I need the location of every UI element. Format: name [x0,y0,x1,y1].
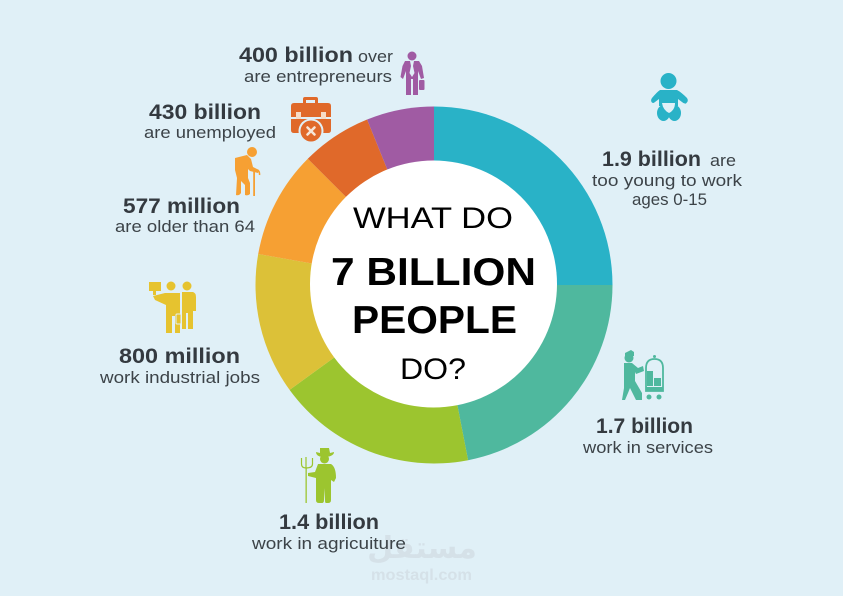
central title [331,202,536,386]
segment: older than 64 [258,159,434,285]
label: entrepreneurs: over [358,47,393,66]
label: agriculture: work in agricuiture [251,534,406,553]
donut hole [310,160,557,408]
segment: entrepreneurs [367,106,434,285]
watermark: mostaql.com [371,567,472,584]
label: unemployed [144,100,276,142]
label: unemployed: are unemployed [144,123,276,142]
label: too young to work [592,147,743,209]
segment: services [434,285,612,460]
label: older than 64: 577 million [123,194,240,218]
label: agriculture [251,510,406,553]
central title: WHAT DO [353,202,513,235]
icon: briefcase [291,97,331,144]
label: too young to work: too young to work [592,171,743,190]
watermark [367,531,477,584]
label: services [582,414,713,457]
donut chart [255,106,612,463]
icon: old man with cane [235,147,260,196]
label: services: work in services [582,438,713,457]
icon: businessman [400,52,424,95]
label: too young to work: 1.9 billion [602,147,701,171]
segment: too young to work [434,106,612,285]
segment: industrial [255,254,434,390]
central title: PEOPLE [352,299,517,342]
label: industrial jobs: work industrial jobs [99,368,260,387]
label: entrepreneurs: 400 billion [239,43,353,67]
label: too young to work: are [710,151,736,170]
watermark: مستقل [367,531,477,566]
central title: 7 BILLION [331,251,536,294]
label: older than 64: are older than 64 [115,217,255,236]
segment: unemployed [308,120,434,285]
icon: baby [651,73,688,121]
label: services: 1.7 billion [596,414,693,438]
label: agriculture: 1.4 billion [279,510,379,534]
label: older than 64 [115,194,255,236]
label: entrepreneurs: are entrepreneurs [244,67,392,86]
central title: DO? [400,353,466,386]
label: industrial jobs: 800 million [119,344,240,368]
icon: industrial workers [149,282,196,333]
label: industrial jobs [99,344,260,387]
icon: hotel porter with luggage cart [622,350,663,400]
label: unemployed: 430 billion [149,100,261,124]
icon: farmer with pitchfork [302,448,336,503]
label: entrepreneurs [239,43,393,86]
label: too young to work: ages 0-15 [632,190,707,209]
segment: agriculture [290,285,468,463]
